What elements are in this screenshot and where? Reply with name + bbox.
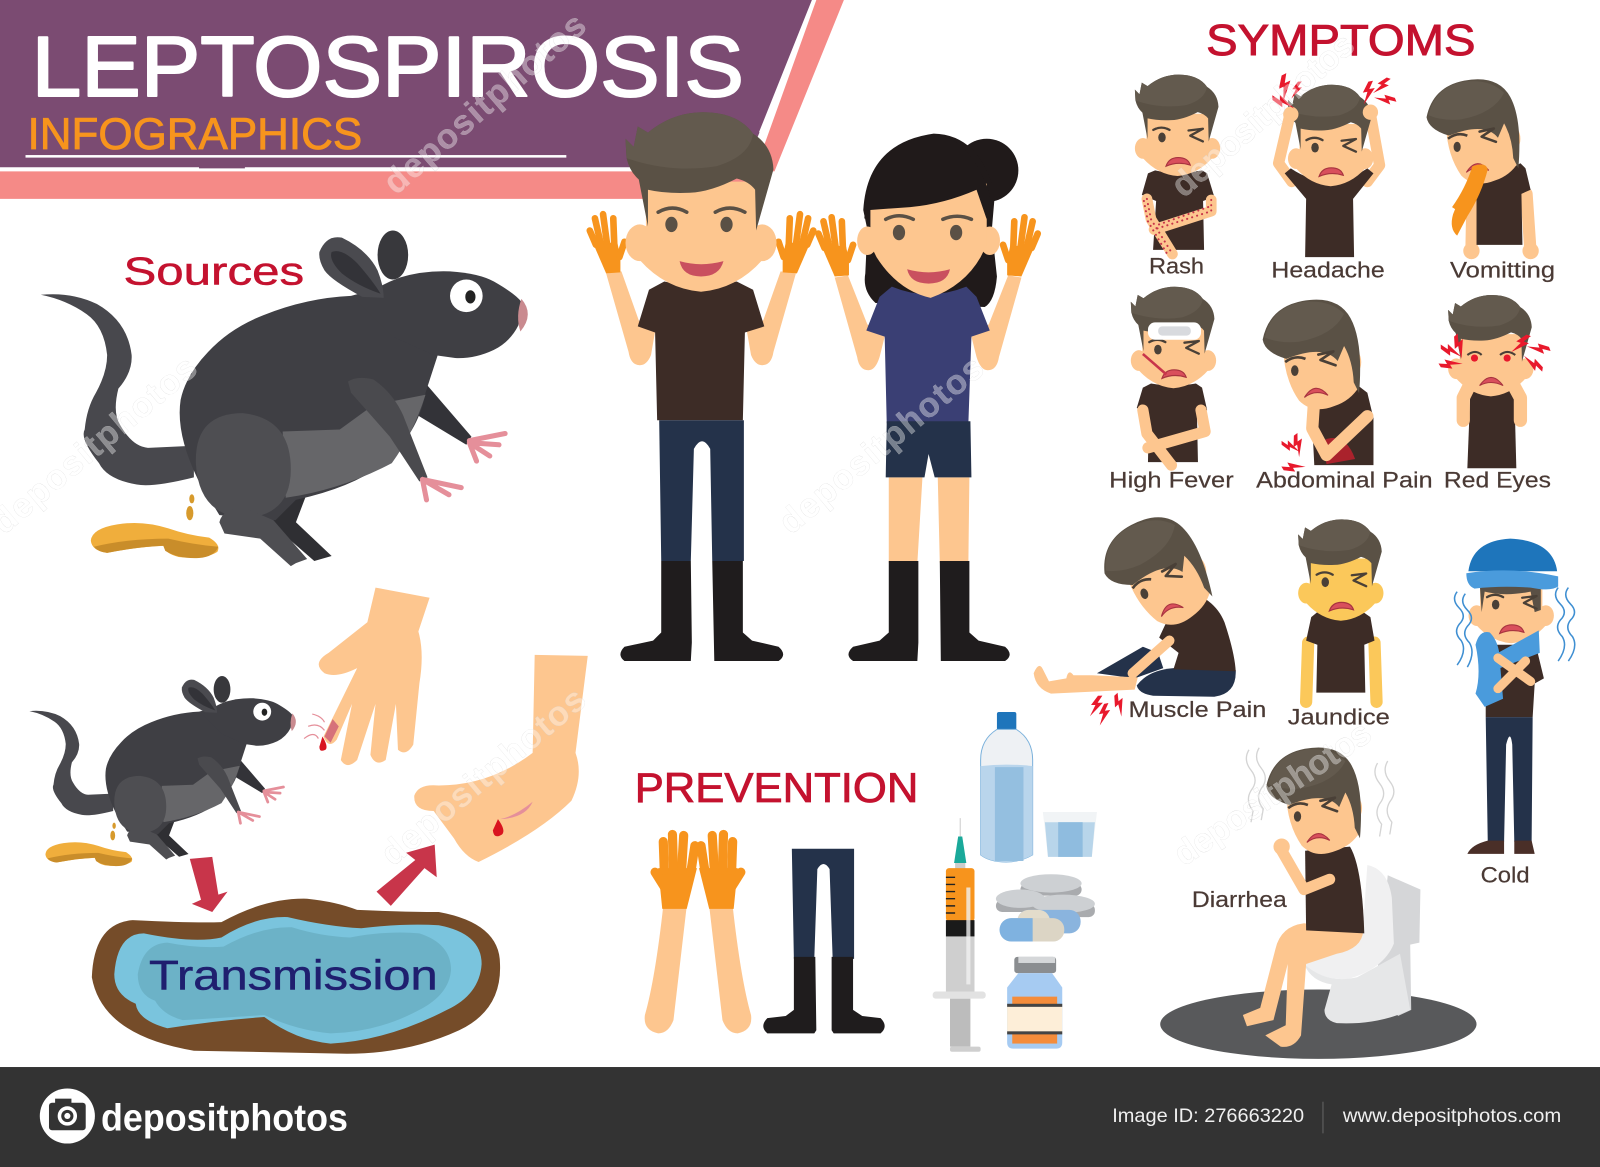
small rat with puddle [29, 676, 296, 866]
icon: injured foot [414, 655, 588, 862]
label: red eyes: Red Eyes [1444, 468, 1551, 493]
transmission label: Transmission [149, 952, 438, 999]
label: jaundice: Jaundice [1288, 704, 1390, 729]
watermarks: depositphotos [376, 6, 594, 202]
icon: injured hand [304, 588, 430, 765]
woman wearing gloves and boots [818, 134, 1038, 661]
icon: syringe [933, 818, 986, 1052]
website: www.depositphotos.com [1342, 1105, 1561, 1127]
header banner [0, 0, 844, 199]
symptom: cold [1455, 539, 1575, 887]
watermarks: depositphotos [1164, 26, 1362, 205]
arrow: into water [190, 857, 228, 912]
label: vomiting: Vomitting [1450, 257, 1555, 282]
symptom: rash [1135, 75, 1220, 278]
label: high fever: High Fever [1109, 468, 1234, 493]
watermarks [0, 6, 1378, 874]
urine puddle [91, 494, 218, 558]
label: cold: Cold [1481, 862, 1530, 887]
label: abdominal pain: Abdominal Pain [1256, 468, 1433, 493]
subtitle: INFOGRAPHICS [28, 108, 362, 159]
watermarks: depositphotos [374, 680, 593, 873]
puddle: transmission [92, 899, 500, 1054]
symptom: vomiting [1427, 79, 1555, 282]
footer bar [0, 1067, 1600, 1167]
symptom: muscle pain [1034, 506, 1266, 726]
label: diarrhea: Diarrhea [1192, 887, 1287, 912]
icon: gloved arms [645, 834, 751, 1033]
man wearing gloves and boots [590, 112, 813, 661]
watermarks: depositphotos [1167, 714, 1378, 874]
heading: sources: Sources [123, 251, 304, 294]
label: muscle pain: Muscle Pain [1129, 697, 1266, 722]
symptom: headache [1271, 73, 1397, 282]
symptom: high fever [1109, 287, 1234, 493]
icon: glass of water [1043, 812, 1097, 857]
logo icon [40, 1088, 95, 1144]
logo wordmark: depositphotos [101, 1096, 348, 1138]
symptom: jaundice [1288, 519, 1390, 729]
label: headache: Headache [1271, 257, 1385, 282]
symptom: abdominal pain [1256, 300, 1433, 493]
heading: symptoms: SYMPTOMS [1206, 16, 1476, 65]
icon: pills and capsules [996, 874, 1095, 942]
large rat [41, 231, 528, 566]
image id: Image ID: 276663220 [1112, 1105, 1304, 1127]
label: rash: Rash [1149, 253, 1204, 278]
title: LEPTOSPIROSIS [32, 19, 744, 115]
arrow: out of water [377, 845, 437, 906]
icon: trousers and boots [763, 849, 885, 1033]
heading: prevention: PREVENTION [635, 764, 918, 811]
symptom: diarrhea [1160, 747, 1477, 1059]
symptom: red eyes [1438, 295, 1551, 493]
icon: water bottle [981, 712, 1033, 862]
toilet [1304, 865, 1420, 1023]
watermarks: depositphotos [772, 349, 991, 542]
icon: medicine vial [1007, 957, 1062, 1049]
